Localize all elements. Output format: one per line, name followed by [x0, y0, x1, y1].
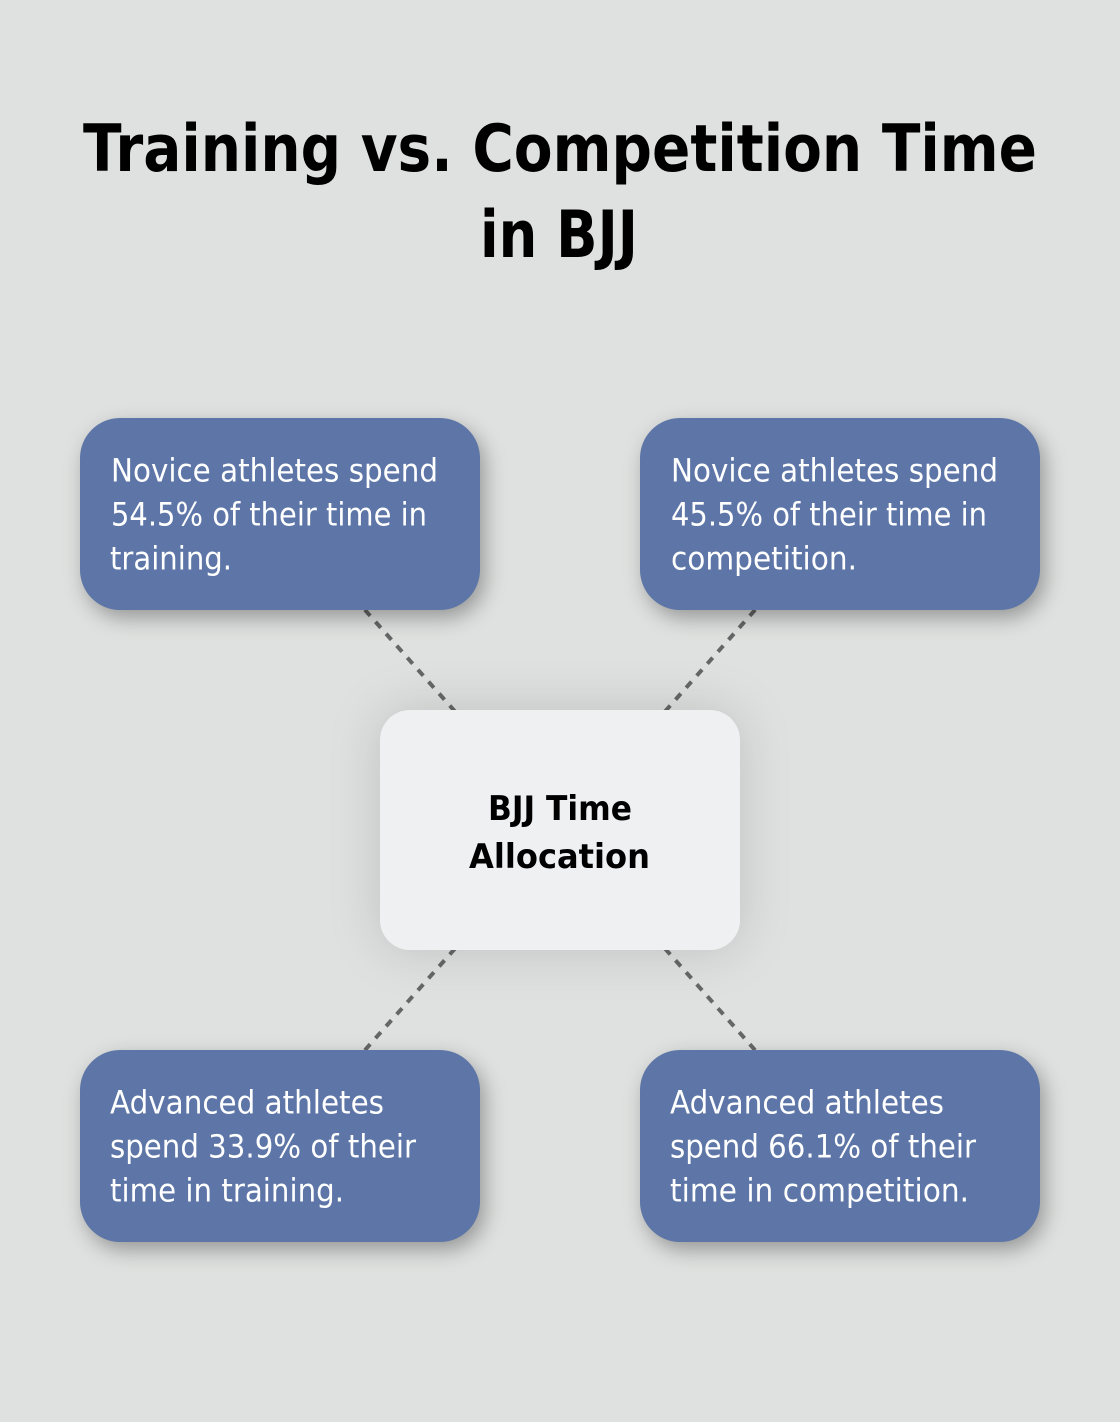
panel: novice training: training.: [110, 540, 232, 578]
panel: novice training: 54.5% of their time in: [111, 496, 427, 534]
title: [83, 112, 1037, 273]
title: in BJJ: [480, 198, 638, 273]
panel: advanced training: time in training.: [110, 1172, 344, 1210]
panel: novice competition: competition.: [671, 540, 857, 578]
panel: advanced training: spend 33.9% of their: [110, 1128, 417, 1166]
panel: center topic: [380, 710, 740, 950]
panel: center topic: Allocation: [469, 837, 650, 877]
panel: advanced training: Advanced athletes: [110, 1084, 384, 1122]
panel: advanced training: [80, 1050, 480, 1242]
panel: advanced competition: spend 66.1% of their: [670, 1128, 977, 1166]
panel: novice training: [80, 418, 480, 610]
panel: advanced competition: [640, 1050, 1040, 1242]
panel: novice competition: [640, 418, 1040, 610]
panel: novice competition: 45.5% of their time in: [671, 496, 987, 534]
panel: novice training: Novice athletes spend: [111, 452, 438, 490]
panel: novice competition: Novice athletes spend: [671, 452, 998, 490]
panel: advanced competition: Advanced athletes: [670, 1084, 944, 1122]
connector lines: [280, 514, 840, 1146]
panel: advanced competition: time in competition.: [670, 1172, 969, 1210]
panel: center topic: BJJ Time: [488, 789, 632, 829]
